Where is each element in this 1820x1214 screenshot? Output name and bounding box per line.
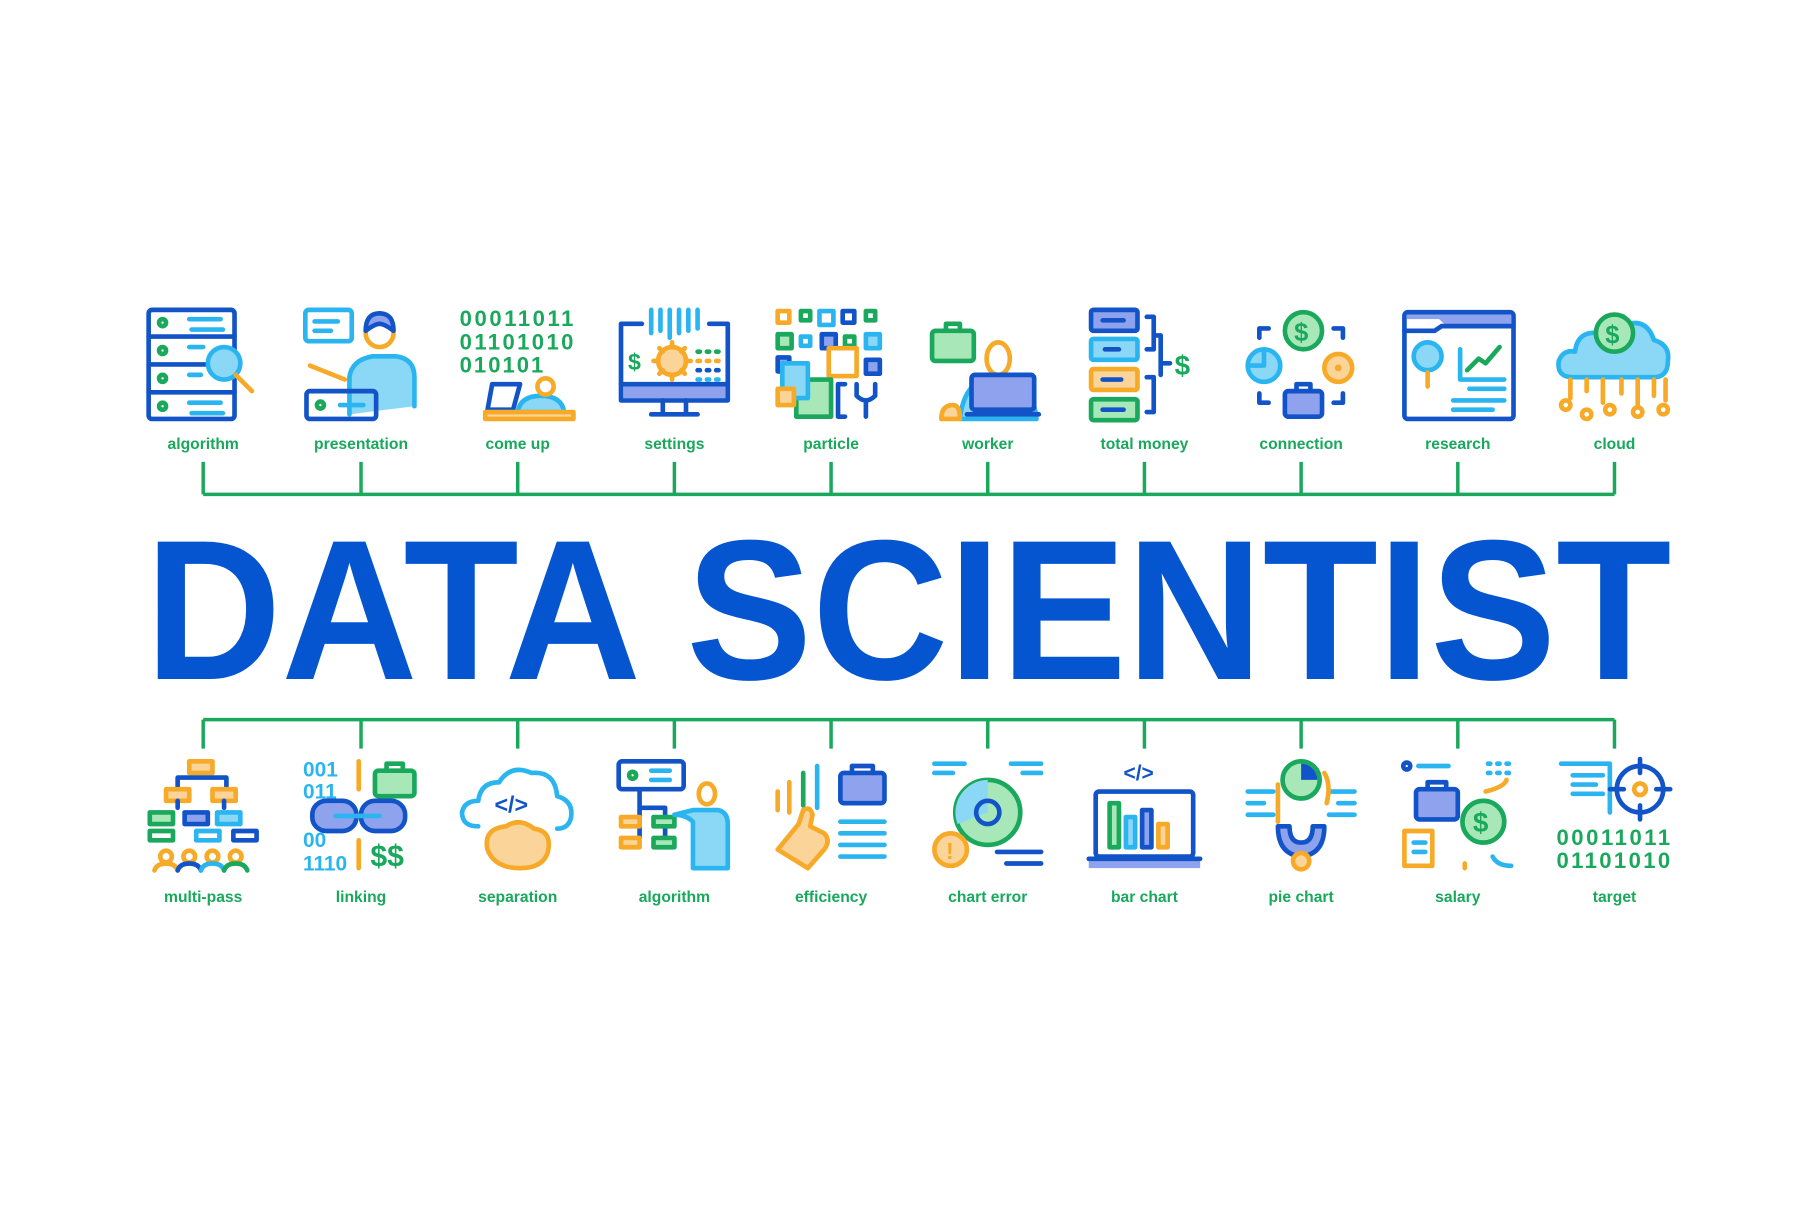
top connector lines: [203, 462, 1614, 494]
icon: linking: [303, 758, 414, 875]
icon: salary: [1403, 763, 1511, 868]
icon: target: 01101010: [1556, 848, 1670, 873]
icon: total money: [1091, 310, 1191, 420]
icon: come up: 00011011: [460, 306, 573, 331]
icon: separation: </>: [495, 791, 528, 817]
label: total money: total money: [1101, 436, 1189, 453]
icon: linking: 1110: [303, 852, 347, 875]
label: algorithm: algorithm: [639, 889, 710, 906]
icon: linking: 001: [303, 758, 338, 781]
icon: efficiency: [778, 766, 884, 868]
label: chart error: chart error: [948, 889, 1027, 906]
icon: linking: 011: [303, 781, 337, 804]
label: bar chart: bar chart: [1111, 889, 1179, 906]
icon: separation: [462, 770, 571, 868]
icon: particle: [778, 311, 880, 417]
icon: pie chart: [1248, 761, 1355, 869]
label: salary: salary: [1435, 889, 1481, 906]
label: linking: linking: [336, 889, 386, 906]
icon: bar chart: [1089, 762, 1200, 868]
icon: algorithm (servers): [149, 310, 252, 419]
label: algorithm: algorithm: [168, 436, 239, 453]
label: multi-pass: multi-pass: [164, 889, 243, 906]
icon: worker: [932, 324, 1039, 419]
icon: cloud: [1558, 315, 1668, 419]
icon: multi-pass: [150, 761, 257, 870]
label: efficiency: efficiency: [795, 889, 867, 906]
icon: presentation: [305, 310, 414, 419]
icon: settings: [621, 310, 728, 414]
label: worker: worker: [961, 436, 1013, 453]
icon: cloud: $: [1605, 322, 1619, 350]
title: DATA SCIENTIST: [145, 499, 1671, 722]
icon: come up: 010101: [460, 353, 543, 378]
icon: target: [1556, 759, 1670, 873]
icon: algorithm 2: [619, 761, 728, 868]
label: separation: separation: [478, 889, 557, 906]
icon: come up: [460, 306, 573, 419]
label: pie chart: pie chart: [1268, 889, 1335, 906]
label: research: research: [1425, 436, 1490, 453]
label: target: target: [1593, 889, 1637, 906]
label: come up: come up: [486, 436, 550, 453]
icon: salary: $: [1473, 807, 1489, 838]
icon: research: [1404, 312, 1514, 419]
icon: come up: 01101010: [460, 329, 573, 354]
label: particle: particle: [803, 436, 859, 453]
label: settings: settings: [644, 436, 705, 453]
icon: linking: $$: [370, 840, 404, 873]
icon: connection: [1248, 312, 1352, 417]
icon: bar chart: </>: [1124, 762, 1154, 785]
icon: connection: $: [1294, 319, 1308, 347]
bottom connector lines: [203, 720, 1614, 749]
icon: settings: $: [628, 349, 641, 375]
icon: linking: 00: [303, 829, 326, 852]
icon: target: 00011011: [1556, 825, 1670, 850]
icon: chart error: !: [946, 838, 954, 864]
label: connection: connection: [1259, 436, 1343, 453]
icon: total money: $: [1175, 350, 1191, 381]
icon: chart error: [934, 764, 1041, 866]
label: presentation: presentation: [314, 436, 408, 453]
label: cloud: cloud: [1594, 436, 1635, 453]
